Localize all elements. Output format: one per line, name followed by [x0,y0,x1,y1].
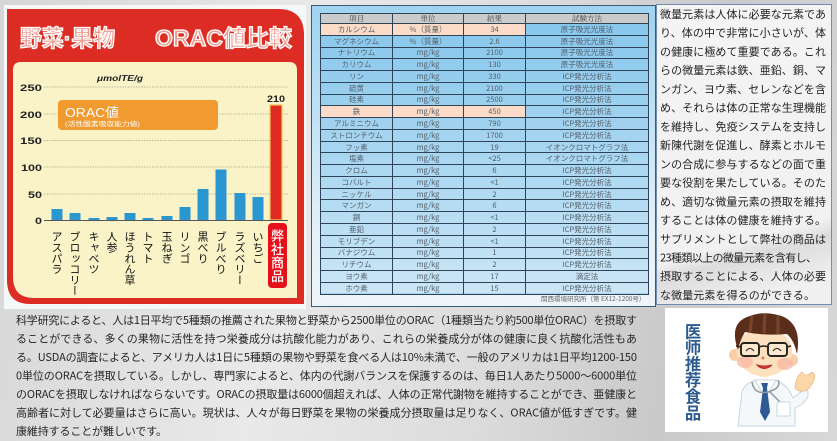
y axis labels: 150 [20,136,42,146]
analysis table: ストロンチウム [330,130,383,141]
analysis table: 滴定法 [576,271,598,282]
analysis table: リチウム [342,259,372,270]
analysis table: 790 [488,118,501,129]
analysis table: ICP発光分析法 [562,236,612,247]
analysis table: モリブデン [338,236,375,247]
analysis table: 17 [490,271,499,282]
panel: trace elements text: め、それらは体の正常な生理機能 [660,100,826,116]
analysis table: <25 [488,153,501,164]
analysis table: ICP発光分析法 [562,259,612,270]
analysis table: ICP発光分析法 [562,189,612,200]
panel: trace elements text: の健康に極めて重要である。これ [660,44,826,60]
category labels: ラズベリー [232,231,248,285]
analysis table: フッ素 [345,142,368,153]
y axis labels: 200 [20,110,42,120]
analysis table: コバルト [342,177,372,188]
analysis table: ICP発光分析法 [562,118,612,129]
panel: trace elements text: り、体の中で非常に小さいが、体 [660,25,826,41]
icon: doctor [729,313,815,426]
analysis table: マンガン [342,200,372,211]
analysis table: 2 [492,224,497,235]
panel: ORAC explanation text: る。USDAの調査によると、アメリカ人は1日に5種類の果物や野菜を食べる人は10%未満で、一般のアメリカは1日平均1200-150 [16,349,637,365]
category labels: トマト [140,231,156,263]
y axis labels: 50 [28,190,42,200]
panel: trace elements text: 要な役割を果たしている。そのた [660,175,826,191]
callout: ORAC value: (活性酸素吸収能力値) [65,119,140,128]
analysis table: 原子吸光光度法 [561,24,613,35]
analysis table: 2500 [486,94,503,105]
analysis table: ICP発光分析法 [562,106,612,117]
category labels: アスパラ [49,231,65,274]
analysis table: ホウ素 [345,283,368,294]
analysis table: クロム [345,165,368,176]
analysis table: mg/kg [417,247,439,258]
analysis table: イオンクロマトグラフ法 [546,153,628,164]
analysis table: 2 [492,189,497,200]
analysis table: 130 [488,59,501,70]
analysis table: mg/kg [417,47,439,58]
analysis table: mg/kg [417,165,439,176]
analysis table: ICP発光分析法 [562,212,612,223]
analysis table: リン [349,71,364,82]
panel: trace elements text: 23種類以上の微量元素を含有し、 [660,250,817,266]
category labels: リンゴ [177,231,193,263]
analysis table: 2.6 [489,36,500,47]
analysis table: 6 [492,200,497,211]
chart frame [7,9,304,304]
analysis table: mg/kg [417,106,439,117]
y axis labels: 0 [35,216,42,226]
analysis table: 硫黄 [349,83,364,94]
analysis table: mg/kg [417,142,439,153]
category labels: キャベツ [86,231,102,274]
analysis table: 硅素 [349,94,364,105]
analysis table: mg/kg [417,71,439,82]
analysis table: mg/kg [417,283,439,294]
category labels [49,231,266,296]
analysis table: 2100 [486,83,503,94]
y axis labels [20,83,42,226]
analysis table: 15 [490,283,499,294]
analysis table: mg/kg [417,212,439,223]
panel: trace elements text: め、適切な微量元素の摂取を維持 [660,193,826,209]
analysis table: mg/kg [417,177,439,188]
analysis table: mg/kg [417,200,439,211]
panel: trace elements text: 摂取することによる、人体の必要 [660,268,826,284]
analysis table: mg/kg [417,271,439,282]
panel: trace elements text: な微量元素を得るのができる。 [660,287,815,303]
analysis table: <1 [490,212,499,223]
analysis table: ICP発光分析法 [562,247,612,258]
y axis labels: 250 [20,83,42,93]
analysis table: 2 [492,259,497,270]
category labels: ほうれん草 [122,231,138,285]
panel: trace elements text: 新陳代謝を促進し、酵素とホルモ [660,137,826,153]
panel: trace elements text: ンの合成に参与するなどの面で重 [660,156,826,172]
title: 野菜·果物 [20,25,115,51]
analysis table: バナジウム [338,247,375,258]
analysis table: イオンクロマトグラフ法 [546,142,628,153]
analysis table: mg/kg [417,236,439,247]
analysis table: ICP発光分析法 [562,283,612,294]
analysis table: ICP発光分析法 [562,165,612,176]
highlighted bar: our product [267,94,285,220]
analysis table: 銅 [353,212,360,223]
analysis table: ICP発光分析法 [562,200,612,211]
category labels: 玉ねぎ [159,231,175,263]
category labels: いちご [250,231,266,263]
category labels: ブルべり [213,231,229,274]
analysis table: 2100 [486,47,503,58]
analysis table: 鉄 [353,106,360,117]
callout: ORAC value [58,100,218,130]
analysis table: 原子吸光光度法 [561,47,613,58]
analysis table: 330 [488,71,501,82]
analysis table: ヨウ素 [345,271,368,282]
highlighted bar: our product: 210 [267,94,285,105]
panel: trace elements text: ンガン、ヨウ素、セレンなどを含 [660,81,826,97]
analysis table: ICP発光分析法 [562,83,612,94]
analysis table: ICP発光分析法 [562,94,612,105]
analysis table: 塩素 [349,153,364,164]
panel: ORAC explanation text: のORACを摂取しなければならないです。ORACの摂取量は6000個超えれば、人体の正常代謝物を維持することができ、亜健康と [16,386,637,402]
analysis table: 1700 [486,130,503,141]
analysis table: %（質量） [410,24,446,35]
category labels: 人参 [104,231,120,253]
analysis table: mg/kg [417,189,439,200]
analysis table: ニッケル [342,189,372,200]
panel: trace elements text [656,4,832,305]
panel: mineral analysis table [311,5,656,307]
analysis table: mg/kg [417,153,439,164]
panel: trace elements text: を維持し、免疫システムを支持し [660,118,826,134]
panel: trace elements text: サプリメントとして弊社の商品は [660,231,826,247]
category labels: ブロッコリー [67,231,83,296]
analysis table: %（質量） [410,36,446,47]
bar chart [52,170,264,220]
panel: ORAC explanation text: 0単位のORACを摂取している。しかし、専門家によると、体内の代謝バランスを保護するのは、毎日1人あたり5000～6000単位 [16,368,637,384]
analysis table: 450 [488,106,501,117]
analysis table: <1 [490,236,499,247]
analysis table: マグネシウム [334,36,379,47]
y axis unit: μmolTE/g [96,73,144,83]
analysis table: 原子吸光光度法 [561,36,613,47]
panel: ORAC explanation text: 高齢者に対して必要量はさらに高い。現状は、人々が毎日野菜を果物の栄養成分摂取量は足りなく、ORAC値が低すぎです。健 [16,404,637,420]
panel: trace elements text: らの微量元素は鉄、亜鉛、銅、マ [660,62,826,78]
panel: ORAC explanation text: ることができる、多くの果物に活性を持つ栄養成分は抗酸化能力があり、これらの栄養成分が体の健康に良く抗酸化活性もあ [16,330,637,346]
panel: doctor recommendation [665,308,828,432]
analysis table: mg/kg [417,94,439,105]
panel: trace elements text: 微量元素は人体に必要な元素であ [660,6,826,22]
panel: ORAC explanation text [16,312,637,436]
label: our product: 弊社商品 [268,228,287,282]
analysis table: ICP発光分析法 [562,177,612,188]
analysis table: アルミニウム [334,118,379,129]
analysis table: 亜鉛 [349,224,364,235]
analysis table: カルシウム [338,24,375,35]
analysis table [320,13,649,295]
callout: ORAC value: ORAC値 [65,105,119,120]
analysis table: 19 [490,142,499,153]
panel: ORAC comparison chart [4,5,306,309]
category labels: 黒べり [195,231,211,263]
analysis table: mg/kg [417,59,439,70]
analysis table: ICP発光分析法 [562,224,612,235]
title: ORAC値比較 [155,25,292,51]
analysis table: mg/kg [417,224,439,235]
y axis labels: 100 [21,163,42,173]
analysis table: 1 [492,247,497,258]
analysis table: カリウム [342,59,372,70]
panel: ORAC explanation text: 科学研究によると、人は1日平均で5種類の推薦された果物と野菜から2500単位のORAC（1種類当たり約500単位ORAC）を摂取す [16,312,637,328]
analysis table: ICP発光分析法 [562,71,612,82]
analysis table: 6 [492,165,497,176]
table source note: 関西環境研究所（第 EX12-1200号） [541,293,645,303]
analysis table: mg/kg [417,83,439,94]
analysis table: mg/kg [417,259,439,270]
analysis table: ナトリウム [338,47,375,58]
analysis table: 34 [490,24,499,35]
vertical heading: 医师推荐食品 [681,323,705,421]
panel: trace elements text: することは体の健康を維持する。 [660,212,826,228]
analysis table: <1 [490,177,499,188]
analysis table: mg/kg [417,118,439,129]
analysis table: 原子吸光光度法 [561,59,613,70]
title [20,25,292,51]
analysis table: ICP発光分析法 [562,130,612,141]
analysis table: mg/kg [417,130,439,141]
